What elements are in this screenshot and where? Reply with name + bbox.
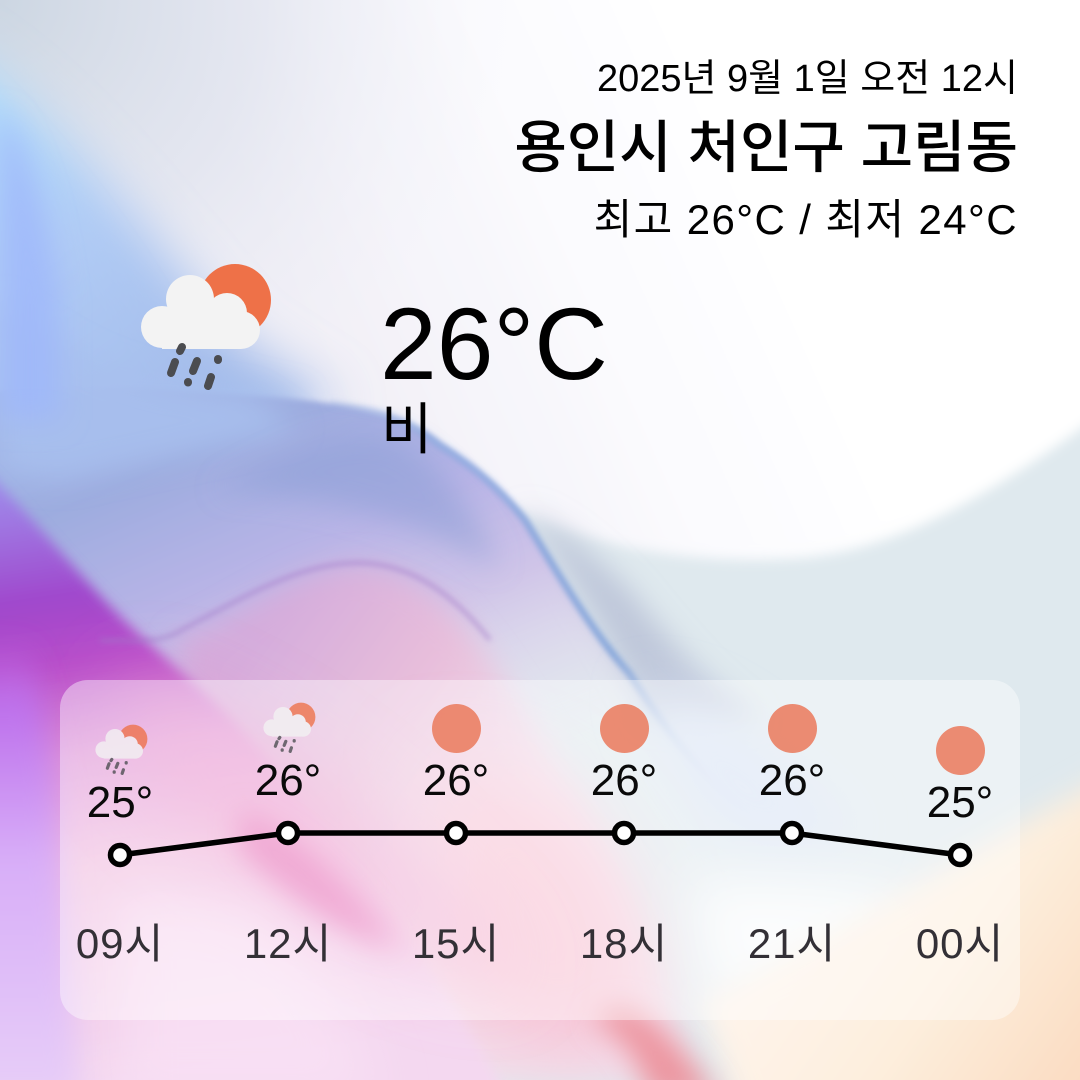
header: date and time: 2025년 9월 1일 오전 12시 bbox=[597, 58, 1018, 100]
icon: 21시 sun bbox=[768, 704, 817, 753]
temperature label: 09시: 25° bbox=[87, 778, 153, 827]
temperature label: 12시: 26° bbox=[255, 756, 321, 805]
temperature label: 18시: 26° bbox=[591, 756, 657, 805]
current condition: 비 bbox=[381, 398, 433, 461]
hour label: 21시: 21시 bbox=[748, 920, 836, 967]
icon: current weather, sun behind rain cloud bbox=[141, 264, 271, 390]
header: high and low temperature: 최고 26°C / 최저 24°C bbox=[594, 196, 1018, 243]
line chart: hourly temperature bbox=[108, 820, 972, 868]
hour label: 09시: 09시 bbox=[76, 920, 164, 967]
hour label: 00시: 00시 bbox=[916, 920, 1004, 967]
panel: hourly forecast bbox=[60, 680, 1020, 1020]
icon: 00시 sun bbox=[936, 726, 985, 775]
temperature label: 00시: 25° bbox=[927, 778, 993, 827]
icon: 09시 rain and sun bbox=[96, 724, 148, 775]
hour label: 18시: 18시 bbox=[580, 920, 668, 967]
icon: 15시 sun bbox=[432, 704, 481, 753]
temperature label: 21시: 26° bbox=[759, 756, 825, 805]
header: location: 용인시 처인구 고림동 bbox=[514, 116, 1018, 180]
hour label: 12시: 12시 bbox=[244, 920, 332, 967]
icon: 12시 rain and sun bbox=[264, 702, 316, 753]
icon: 18시 sun bbox=[600, 704, 649, 753]
hour label: 15시: 15시 bbox=[412, 920, 500, 967]
current temperature: 26°C bbox=[380, 287, 608, 401]
temperature label: 15시: 26° bbox=[423, 756, 489, 805]
